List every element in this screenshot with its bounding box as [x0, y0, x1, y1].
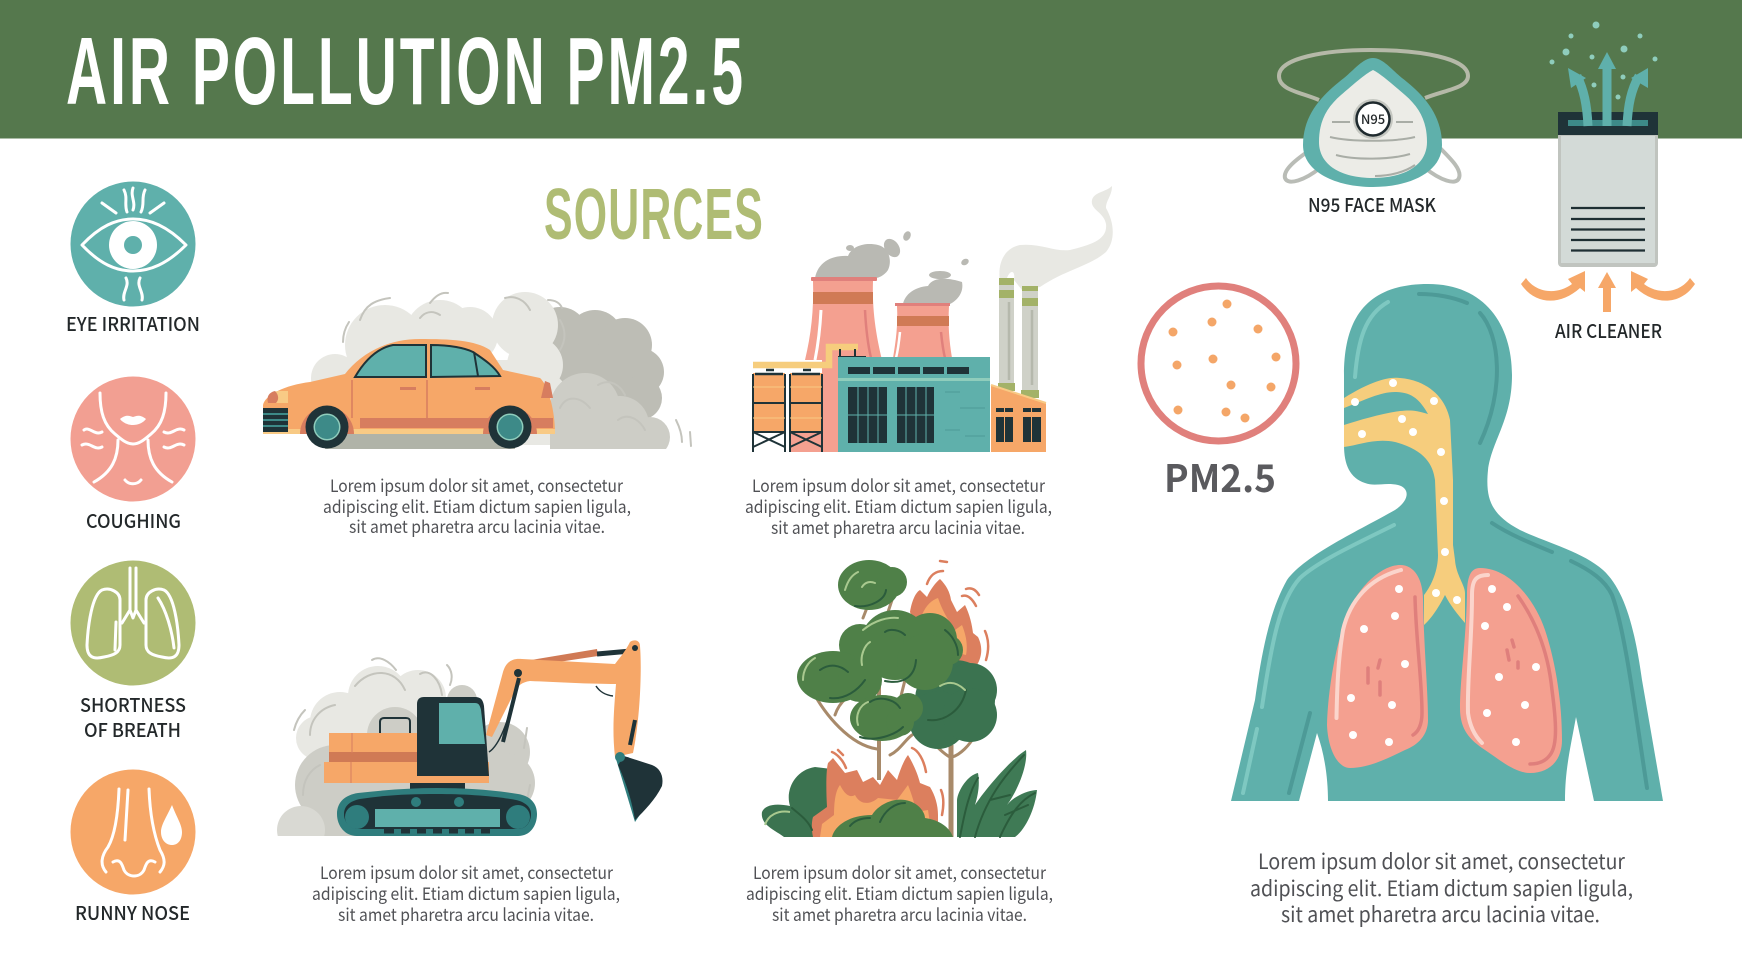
airway particles [1351, 379, 1461, 604]
text: body description: adipiscing elit. Etiam dictum sapien ligula, [1250, 873, 1633, 903]
exhaust tick [676, 420, 691, 446]
tree canopies [797, 560, 997, 749]
text: body description [1250, 846, 1633, 929]
text: car description [323, 472, 631, 538]
icon: throat [70, 376, 196, 502]
body highlights [1243, 294, 1647, 793]
smoke cloud [311, 292, 670, 457]
source: car exhaust illustration [263, 292, 691, 457]
excavator cab [417, 697, 489, 776]
car windows [355, 345, 500, 377]
source: excavator illustration [277, 640, 663, 854]
text: car description: sit amet pharetra arcu lacinia vitae. [349, 513, 605, 538]
pink wall and pipe [753, 347, 866, 452]
label: shortness of breath: OF BREATH [84, 716, 181, 743]
text: car description: adipiscing elit. Etiam dictum sapien ligula, [323, 493, 631, 518]
excavator boom and stick [486, 640, 641, 757]
mask valve: N95 [1361, 109, 1385, 128]
human body with lungs [1231, 284, 1663, 801]
cleaner intake arrows [1521, 271, 1695, 312]
foreground bushes and leaves [765, 750, 1037, 837]
text: wildfire description: adipiscing elit. Etiam dictum sapien ligula, [746, 880, 1053, 905]
annex building [991, 385, 1046, 452]
clean air particles [1550, 22, 1658, 100]
canopy: dark right tree [909, 660, 997, 749]
icon: lungs [70, 560, 196, 686]
text: wildfire description: sit amet pharetra arcu lacinia vitae. [772, 901, 1027, 926]
body silhouette [1231, 284, 1663, 801]
mask shell [1303, 58, 1442, 187]
air cleaner [1521, 22, 1695, 312]
canopy: top tree [838, 560, 907, 610]
source: factory illustration [753, 186, 1113, 452]
symptom: eye irritation [66, 182, 200, 337]
heading: sources: SOURCES [544, 175, 764, 255]
factory grey smoke [815, 230, 970, 304]
car body [263, 339, 555, 433]
excavator smoke [277, 658, 535, 854]
text: factory description: sit amet pharetra arcu lacinia vitae. [771, 514, 1025, 539]
trunks and branches [812, 600, 975, 837]
label: N95 face mask: N95 FACE MASK [1308, 191, 1436, 218]
source: wildfire illustration [762, 560, 1037, 837]
text: excavator description [312, 859, 620, 926]
excavator body [324, 718, 489, 783]
text: factory description: Lorem ipsum dolor sit amet, consectetur [752, 472, 1045, 497]
excavator tracks [337, 783, 537, 836]
text: body description: sit amet pharetra arcu lacinia vitae. [1281, 899, 1600, 929]
title: AIR POLLUTION PM2.5 [66, 18, 746, 125]
mask valve [1353, 99, 1393, 139]
car wheels [306, 406, 532, 448]
text: factory description [745, 472, 1052, 539]
mask ear loops [1285, 148, 1460, 182]
text: excavator description: Lorem ipsum dolor sit amet, consectetur [320, 859, 613, 884]
label: eye irritation: EYE IRRITATION [66, 310, 200, 337]
right lung [1460, 568, 1562, 773]
chimneys [998, 278, 1039, 398]
symptom: shortness of breath [70, 560, 196, 743]
car trim [263, 380, 555, 434]
N95 face mask [1279, 50, 1468, 187]
text: wildfire description: Lorem ipsum dolor sit amet, consectetur [753, 859, 1046, 884]
cooling towers [805, 277, 952, 360]
storage tanks [753, 370, 822, 452]
text: excavator description: sit amet pharetra arcu lacinia vitae. [338, 901, 594, 926]
mask head strap [1279, 50, 1468, 100]
nasal passage wedge [1344, 392, 1428, 425]
lower flame [762, 748, 943, 837]
header banner [0, 0, 1742, 138]
airway [1344, 378, 1465, 625]
factory white smoke [999, 186, 1113, 290]
text: car description: Lorem ipsum dolor sit amet, consectetur [330, 472, 623, 497]
label: coughing: COUGHING [86, 507, 181, 534]
smoke ticks [294, 710, 530, 800]
symptom: runny nose [70, 770, 196, 926]
label: PM2.5: PM2.5 [1164, 448, 1276, 503]
excavator bucket [615, 752, 663, 822]
PM2.5 particle circle [1141, 286, 1296, 441]
left lung [1327, 565, 1428, 768]
label: shortness of breath: SHORTNESS [80, 691, 186, 718]
icon: eye [70, 182, 196, 306]
mask filter [1319, 70, 1427, 178]
label: runny nose: RUNNY NOSE [75, 899, 190, 926]
icon: nose [70, 770, 196, 894]
upper flame [910, 561, 988, 665]
text: factory description: adipiscing elit. Etiam dictum sapien ligula, [745, 493, 1052, 518]
label: air cleaner: AIR CLEANER [1555, 317, 1662, 344]
canopy: lower tree [850, 693, 923, 741]
main building [838, 357, 990, 452]
text: body description: Lorem ipsum dolor sit amet, consectetur [1258, 846, 1626, 876]
text: excavator description: adipiscing elit. Etiam dictum sapien ligula, [312, 880, 620, 905]
label: shortness of breath [80, 691, 186, 743]
canopy: main tree [797, 610, 963, 703]
symptom: coughing [70, 376, 196, 534]
cleaner outflow arrows [1568, 52, 1648, 126]
canopy details [820, 590, 966, 739]
text: wildfire description [746, 859, 1053, 926]
car shadow [325, 430, 515, 449]
cleaner housing [1558, 112, 1658, 267]
